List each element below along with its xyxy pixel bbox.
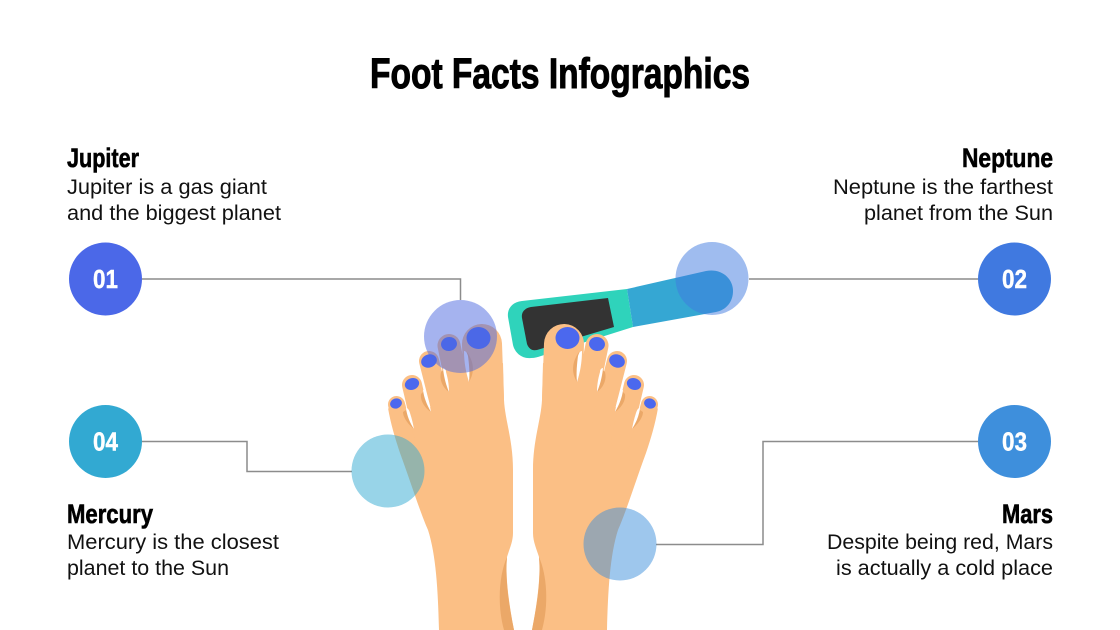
illustration: right foot: [532, 327, 658, 630]
title: Foot Facts Infographics: [370, 50, 750, 98]
toenails: [389, 327, 490, 410]
marker: left foot side highlight: [352, 434, 424, 508]
number badge 04: 04: [93, 426, 118, 456]
toenails: [556, 327, 657, 410]
illustration: nail file: [508, 270, 733, 358]
number badge 03: 03: [1002, 426, 1027, 456]
number badge 04: [69, 405, 142, 478]
toe gaps and shadows: [403, 351, 514, 630]
illustration: left foot: [388, 327, 514, 630]
number badge 01: [69, 242, 142, 316]
panel: Mars: [827, 405, 1053, 580]
number badge 02: 02: [1002, 264, 1027, 294]
description: Neptune is the farthest: [833, 175, 1053, 199]
heading: Mercury: [67, 499, 153, 529]
heading: Mars: [1002, 499, 1053, 529]
marker: right foot side highlight: [584, 508, 656, 580]
description: [67, 175, 281, 225]
toe gaps and shadows: [532, 351, 643, 630]
description: planet to the Sun: [67, 556, 229, 580]
description: planet from the Sun: [864, 201, 1053, 225]
description: Mercury is the closest: [67, 530, 279, 554]
marker: toes highlight: [424, 300, 497, 373]
heading: Neptune: [962, 143, 1053, 173]
description: and the biggest planet: [67, 201, 281, 225]
heading: Jupiter: [67, 143, 139, 173]
panel: Neptune: [833, 143, 1053, 316]
connector lines: [142, 279, 978, 544]
description: is actually a cold place: [836, 556, 1053, 580]
description: Jupiter is a gas giant: [67, 175, 267, 199]
description: Despite being red, Mars: [827, 530, 1053, 554]
number badge 03: [978, 405, 1051, 478]
description: [827, 530, 1053, 580]
marker: file handle highlight: [676, 242, 748, 315]
number badge 02: [978, 242, 1051, 316]
panel: Mercury: [67, 405, 279, 580]
description: [67, 530, 279, 580]
description: [833, 175, 1053, 225]
number badge 01: 01: [93, 264, 118, 294]
panel: Jupiter: [67, 143, 281, 316]
